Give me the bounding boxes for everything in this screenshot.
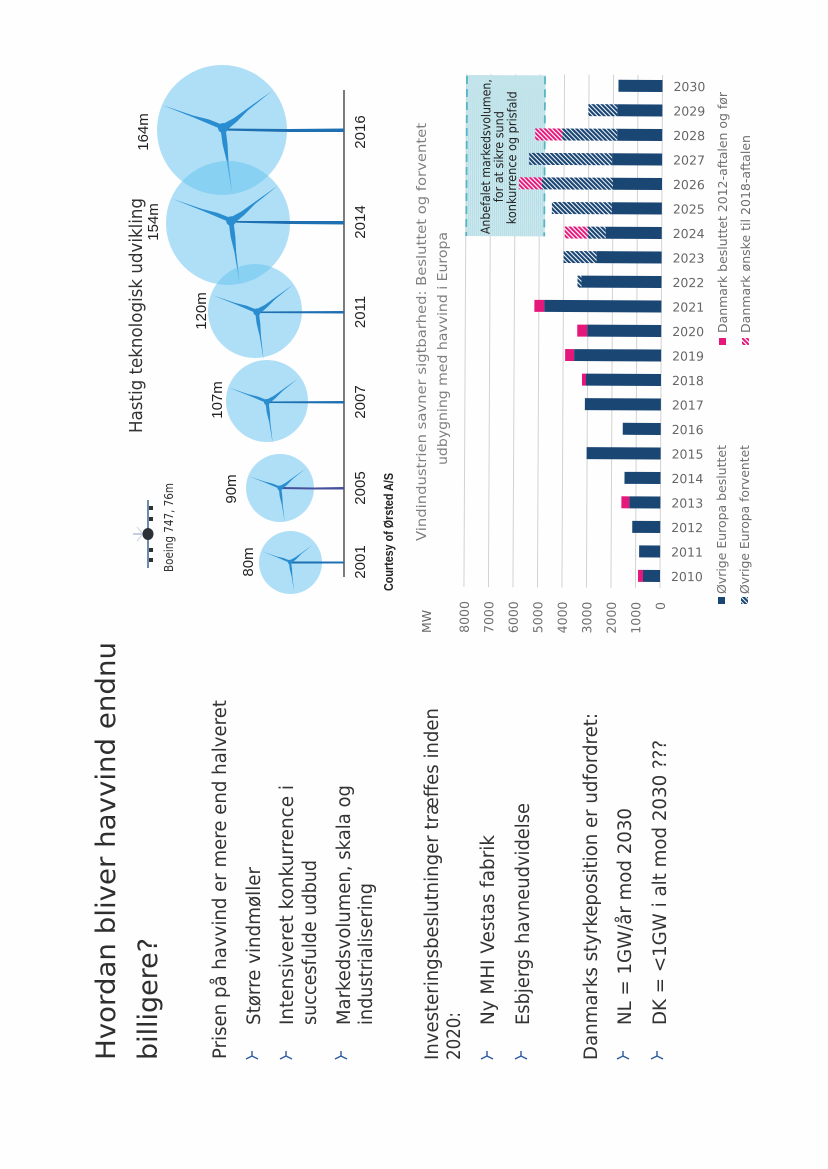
year labels: 2021: [672, 300, 704, 315]
text block: investments: 2020:: [444, 1012, 465, 1060]
bullet list: price drivers: succesfulde udbud: [300, 860, 321, 1025]
bullet list: Danish position: NL = 1GW/år mod 2030: [615, 808, 636, 1025]
bar chart: offshore wind build-out: [457, 74, 705, 634]
turbine 2007: 2007: [352, 385, 369, 419]
title: [91, 642, 164, 1060]
year labels: 2027: [673, 153, 705, 168]
value axis labels: 2000: [604, 602, 619, 634]
value axis labels: 0: [653, 602, 668, 610]
text block: price: [210, 700, 377, 1059]
turbine 2005: [223, 454, 369, 522]
year labels: 2018: [672, 373, 704, 388]
title: billigere?: [133, 938, 164, 1060]
turbine 2011: [193, 264, 369, 359]
bullet list: price drivers: Større vindmøller: [244, 867, 265, 1025]
turbine 2001: [240, 531, 369, 594]
timeline axis: [343, 90, 345, 577]
callout: recommended market volume: [466, 75, 546, 236]
value axis labels: 7000: [481, 601, 496, 633]
turbine 2014: 154m: [145, 203, 162, 241]
turbine 2001: 2001: [352, 545, 369, 579]
year labels: 2015: [672, 447, 703, 462]
credit: Courtesy of Ørsted A/S: [382, 473, 396, 591]
bullet list: investments: Ny MHI Vestas fabrik: [478, 835, 499, 1025]
legend: Danmark ønske til 2018-aftalen: [738, 135, 753, 333]
chart title: udbygning med havvind i Europa: [436, 232, 451, 465]
turbine 2016: 2016: [352, 115, 369, 149]
turbine 2011: 2011: [352, 296, 369, 328]
gridlines: [464, 74, 663, 588]
year labels: 2023: [673, 251, 704, 266]
bullet list: investments: Esbjergs havneudvidelse: [513, 803, 534, 1025]
year labels: 2025: [673, 202, 705, 217]
legend: Øvrige Europa besluttet: [714, 445, 729, 594]
legend: Øvrige Europa forventet: [737, 445, 752, 594]
chart title: Vindindustrien savner sigtbarhed: Besluttet og forventet: [415, 123, 430, 541]
value axis labels: 1000: [628, 602, 643, 634]
year labels: 2024: [673, 226, 705, 241]
callout: recommended market volume: Anbefalet markedsvolumen,: [478, 79, 494, 234]
turbine 2016: [135, 65, 369, 195]
value axis labels: 6000: [506, 601, 521, 633]
year labels: 2013: [671, 496, 703, 511]
turbine 2007: [209, 360, 369, 443]
year labels: 2020: [672, 324, 704, 339]
icon: Boeing 747 airplane: [133, 500, 154, 568]
value axis labels: 4000: [555, 601, 570, 633]
turbine 2014: 2014: [352, 205, 369, 239]
text block: Danish position: Danmarks styrkeposition er udfordret:: [581, 713, 602, 1060]
year labels: 2026: [673, 177, 705, 192]
bullet list: price drivers: industrialisering: [356, 883, 377, 1025]
text block: Danish position: [581, 713, 671, 1060]
year labels: 2019: [672, 349, 704, 364]
year labels: 2012: [671, 520, 703, 535]
axis unit: MW: [419, 610, 434, 633]
value axis labels: 5000: [530, 601, 545, 633]
year labels: 2016: [672, 422, 704, 437]
text block: investments: Investeringsbeslutninger træffes inden: [422, 708, 443, 1060]
year labels: 2017: [672, 398, 704, 413]
turbine 2014: [145, 161, 369, 285]
year labels: 2010: [671, 569, 703, 584]
text block: price: Prisen på havvind er mere end halveret: [210, 700, 231, 1059]
value axis labels: 3000: [579, 602, 594, 633]
legend: Danmark besluttet 2012-aftalen og før: [715, 91, 730, 333]
year labels: 2014: [671, 471, 703, 486]
year labels: [671, 79, 705, 584]
bars: [517, 79, 663, 582]
heading: turbine development: Hastig teknologisk udvikling: [126, 198, 147, 433]
year labels: 2011: [671, 545, 703, 560]
value axis labels: [457, 601, 668, 634]
year labels: 2028: [673, 128, 705, 143]
bullet list: investments: [478, 803, 534, 1059]
bullet list: price drivers: Markedsvolumen, skala og: [334, 785, 355, 1025]
bullet list: Danish position: DK = <1GW i alt mod 2030 ???: [650, 740, 671, 1025]
bullet list: price drivers: Intensiveret konkurrence i: [277, 785, 298, 1025]
turbine 2001: 80m: [240, 547, 257, 577]
bullet list: Danish position: [615, 740, 671, 1059]
year labels: 2029: [673, 104, 705, 119]
legend: [714, 91, 753, 604]
year labels: 2022: [672, 275, 704, 290]
turbine 2005: 2005: [352, 471, 369, 505]
title: Hvordan bliver havvind endnu: [91, 642, 122, 1060]
value axis labels: 8000: [457, 601, 472, 633]
turbine 2005: 90m: [223, 474, 240, 504]
callout: recommended market volume: konkurrence og prisfald: [504, 91, 519, 224]
year labels: 2030: [673, 79, 705, 94]
turbine 2016: 164m: [135, 113, 152, 151]
callout: recommended market volume: for at sikre sund: [491, 111, 506, 202]
bullet list: price drivers: [244, 785, 377, 1059]
turbine 2011: 120m: [193, 292, 210, 330]
text block: investments: [422, 708, 534, 1060]
label: Boeing: Boeing 747, 76m: [162, 483, 176, 572]
chart title: [415, 123, 451, 541]
turbine 2007: 107m: [209, 381, 226, 419]
